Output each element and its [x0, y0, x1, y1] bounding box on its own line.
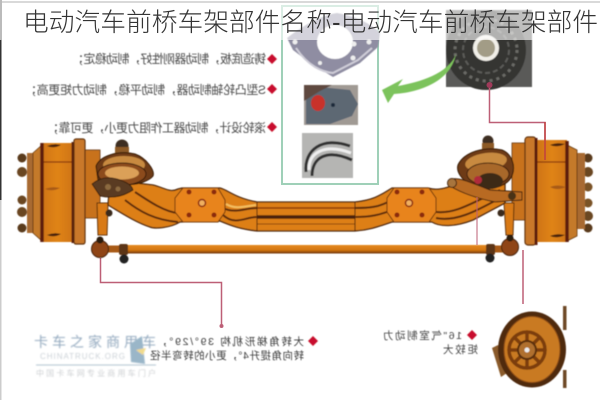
leader lines — [100, 85, 545, 326]
arrow: green curved — [382, 54, 456, 103]
front axle — [17, 136, 593, 264]
mirrored feature list — [25, 51, 277, 135]
brake drum detail — [492, 306, 566, 388]
photo: brake bracket — [287, 13, 380, 77]
steering knuckle — [450, 179, 522, 202]
title band — [0, 0, 600, 40]
left steering arm — [92, 203, 128, 264]
watermark logo: 中国卡车网专业商用车门户 — [36, 368, 156, 378]
red leader end on drum — [544, 122, 546, 160]
leader: joint to drum detail — [522, 250, 524, 304]
right hub — [512, 143, 527, 220]
title: 电动汽车前桥车架部件名称-电动汽车前桥车架部件 — [23, 8, 598, 37]
photo: brake assembly — [446, 10, 532, 90]
watermark logo: CHINATRUCK.ORG — [40, 352, 125, 361]
mirrored steering text: 转向角提升4°，更小的转弯半径 — [150, 349, 304, 362]
leader: photo to drum — [490, 85, 545, 160]
mirrored steering text: 大转角梯形机构 39°/29°， — [157, 335, 304, 348]
leader: joint to steering text — [100, 258, 222, 326]
right brake chamber — [448, 136, 522, 202]
feature 1: 铸造底板，制动器刚性好，制动稳定； — [72, 51, 266, 66]
mirrored steering text — [150, 335, 318, 362]
left hub — [84, 150, 100, 218]
tie rod — [125, 245, 491, 254]
mirrored chamber text: 16"气室制动力 — [383, 329, 462, 342]
thin leader over beam — [476, 197, 478, 245]
right brake drum — [525, 137, 593, 245]
left mounting pad — [175, 188, 225, 222]
feature 2: S型凸轮轴制动器，制动平稳，制动力矩更高； — [25, 82, 266, 97]
feature 3: 滚轮设计，制动器工作阻力更小，更可靠； — [47, 120, 266, 135]
left brake chamber — [92, 140, 153, 197]
watermark logo — [34, 334, 156, 378]
right steering arm — [486, 203, 518, 262]
mirrored chamber text: 矩较大 — [442, 343, 478, 356]
left brake drum — [17, 139, 85, 244]
left edge strip — [0, 40, 2, 400]
panel: component photos — [282, 6, 380, 184]
right mounting pad — [387, 188, 436, 222]
photo: S-cam — [304, 85, 358, 125]
axle beam — [108, 178, 505, 231]
photo: brake shoe — [302, 133, 353, 178]
watermark logo: 卡车之家商用车 — [34, 334, 156, 350]
mirrored chamber text — [383, 329, 478, 356]
